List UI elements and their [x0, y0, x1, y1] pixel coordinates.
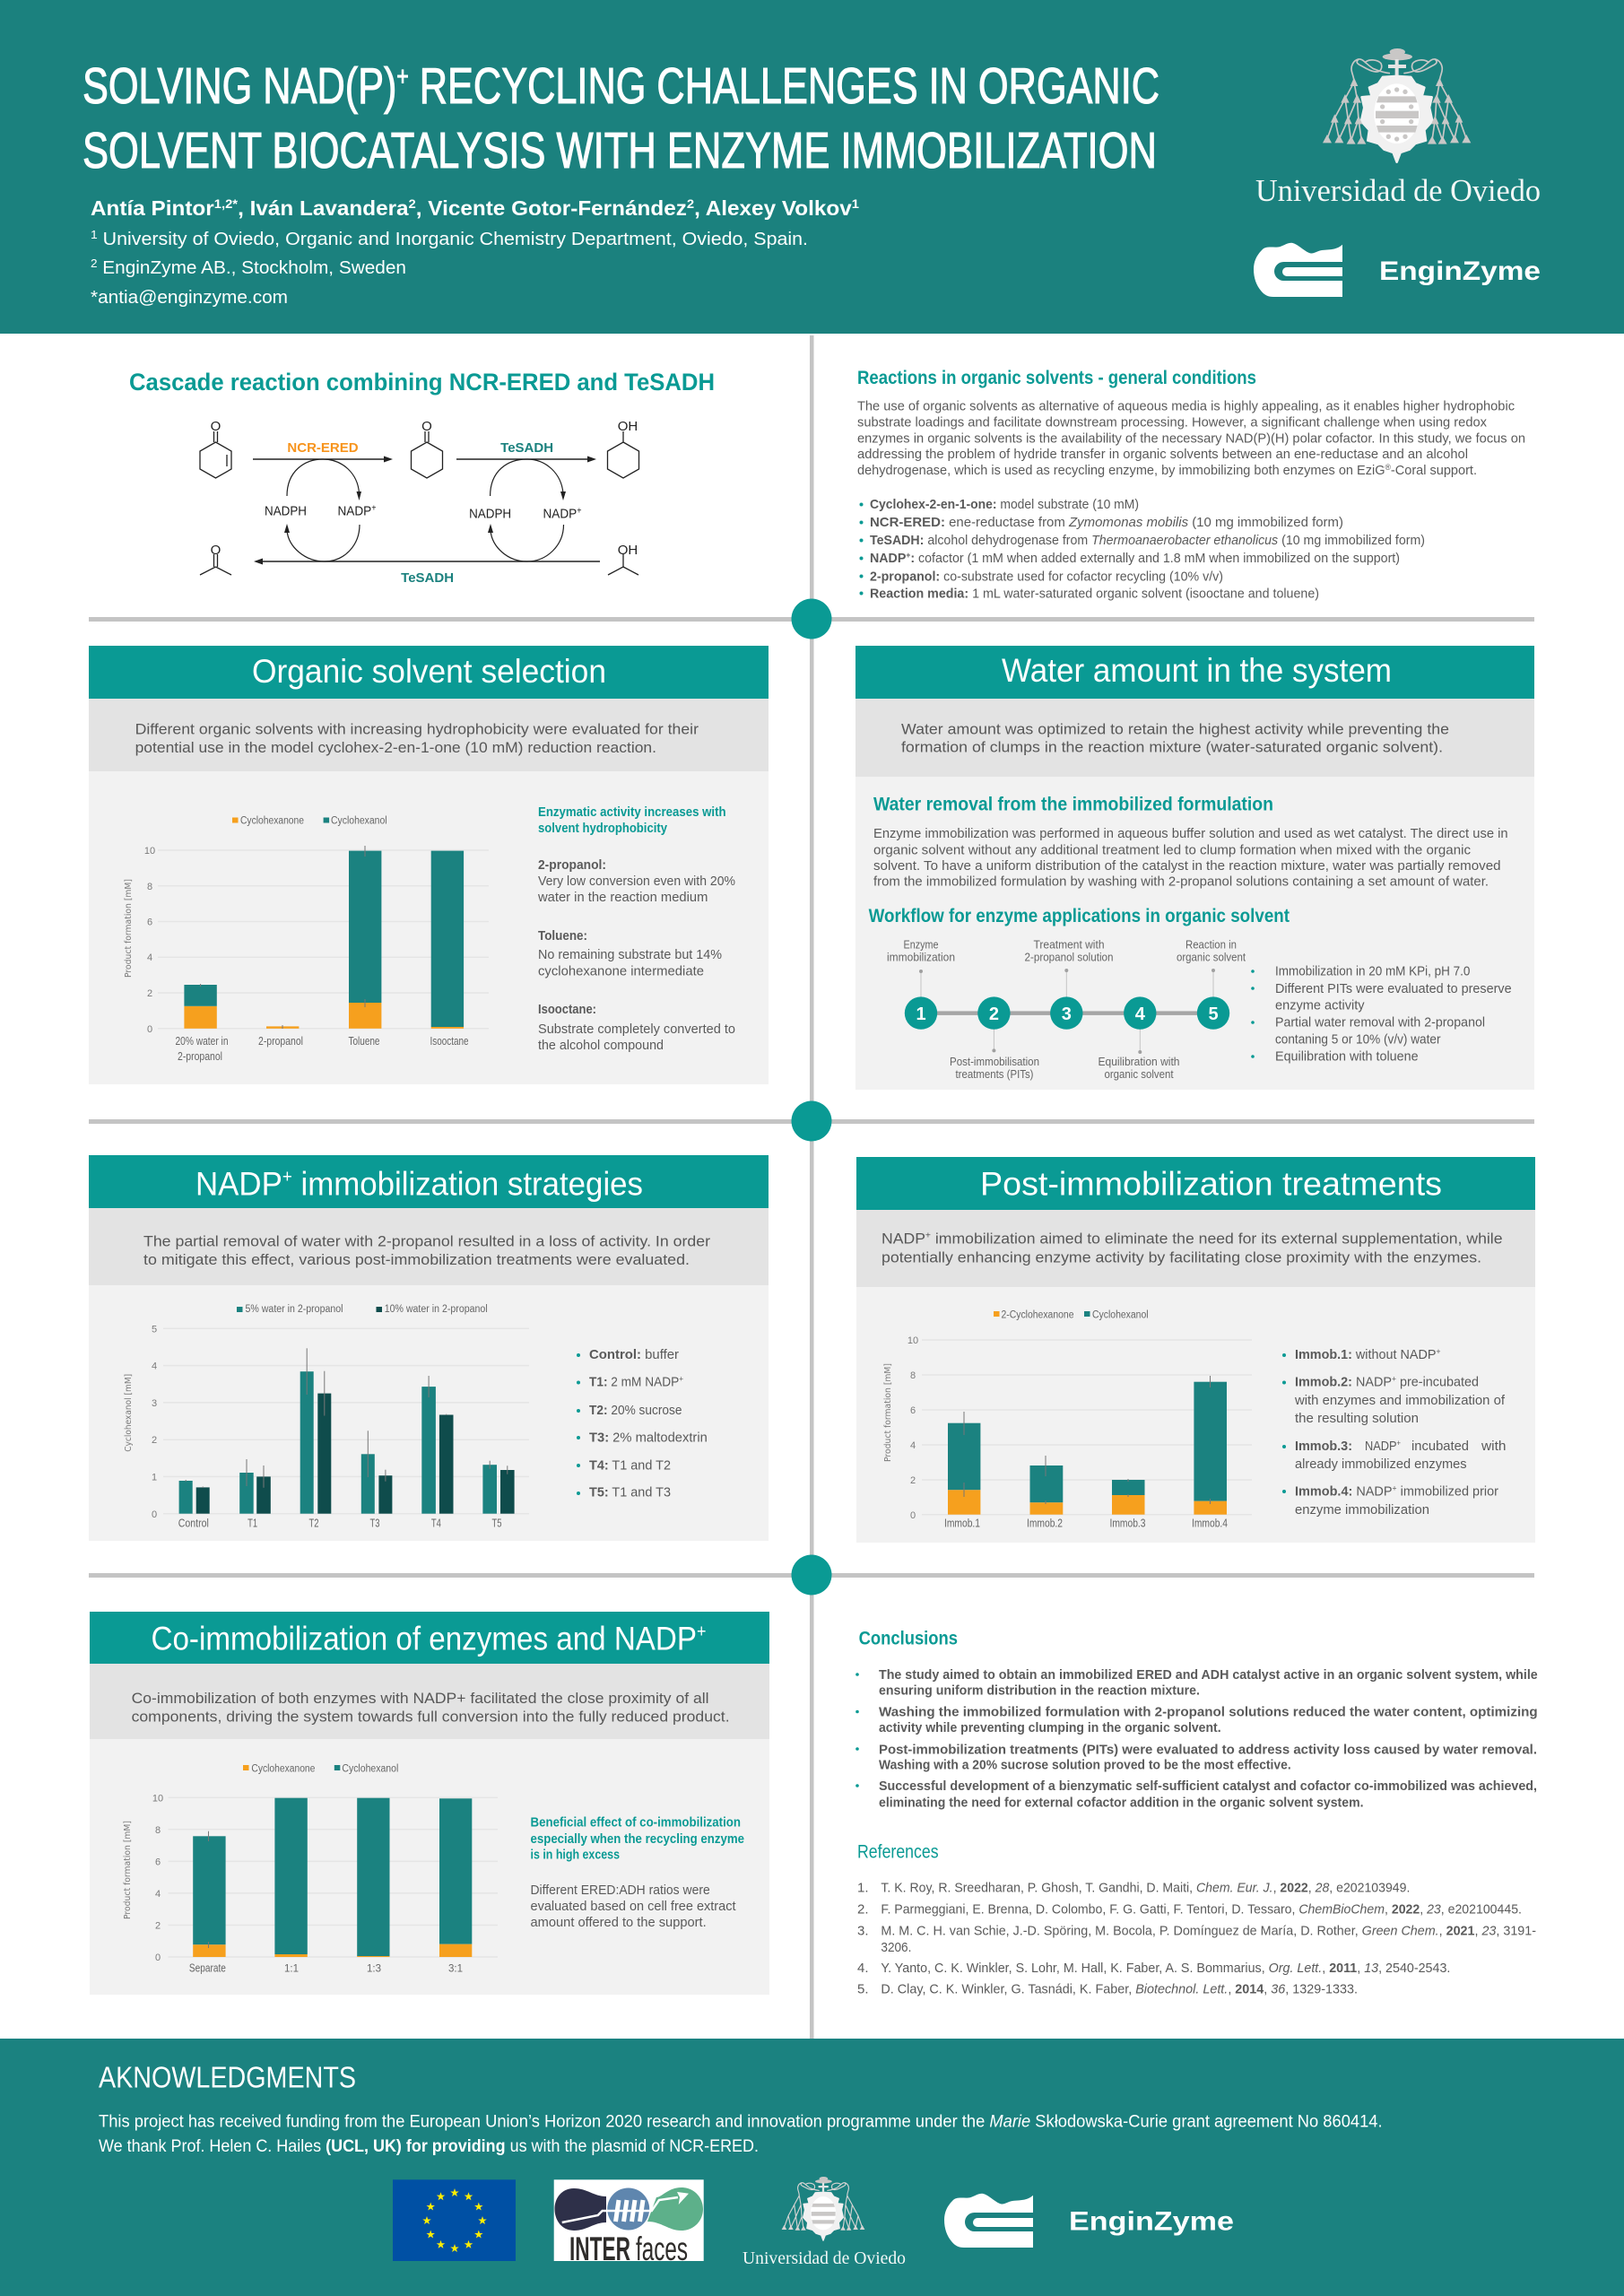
bar chart: co-immobilization: 2: [155, 1921, 161, 1932]
paragraph: general conditions: dehydrogenase, which is used as recycling enzyme, by immobilizing both enzymes on EziG: [857, 463, 1403, 478]
panel: post-immobilization treatments: [856, 1157, 1535, 1543]
section title: water amount: [855, 646, 1534, 699]
intro box: water amount: Water amount was optimized to retain the highest activity while preventing the: [901, 721, 1449, 738]
intro box: solvent selection: [89, 699, 769, 771]
affiliations: *antia@enginzyme.com: [91, 288, 288, 308]
legend: [232, 816, 387, 827]
list: references: 3.: [857, 1923, 869, 1938]
bar chart: solvent selection: Isooctane: [430, 1035, 469, 1048]
list: workflow notes: enzyme activity: [1275, 998, 1365, 1013]
bar chart: co-immobilization: 1:3: [367, 1963, 381, 1974]
takeaways: solvent selection: Enzymatic activity increases with: [538, 804, 726, 820]
heading: references: References: [857, 1841, 939, 1862]
paragraph: general conditions: enzymes in organic solvents is the availability of the necessary NAD(P)(H) polar cofactor. In this study, we focus on: [857, 430, 1525, 446]
bar chart: cyclohexanol: Control: [178, 1518, 209, 1530]
bar chart: co-immobilization: Product formation [mM]: [123, 1821, 133, 1919]
intro box: water amount: formation of clumps in the reaction mixture (water-saturated organic solvent).: [901, 739, 1443, 756]
section title: strategies: immobilization strategies: [292, 1166, 643, 1203]
workflow timeline: Equilibration with: [1098, 1056, 1180, 1068]
list: workflow notes: Different PITs were evaluated to preserve: [1275, 981, 1512, 996]
intro box: solvent selection: Different organic solvents with increasing hydrophobicity were evaluated for their: [135, 721, 699, 738]
list: immobilization methods: Immob.3:: [1295, 1439, 1352, 1454]
EnginZyme wordmark small: EnginZyme: [1069, 2207, 1234, 2237]
list: immobilization methods: +: [1393, 1483, 1397, 1492]
heading: conclusions: Conclusions: [859, 1628, 958, 1648]
legend: Cyclohexanol: [342, 1764, 398, 1775]
list: treatments: [577, 1347, 708, 1500]
section title: post-immobilization: Post-immobilization treatments: [980, 1166, 1442, 1203]
legend: [243, 1764, 398, 1775]
takeaways: solvent selection: Toluene:: [538, 928, 587, 944]
list: reaction conditions: +: [906, 551, 910, 560]
bar chart: immobilization: [883, 1309, 1252, 1530]
logo: INTERfaces: INTER: [569, 2231, 630, 2267]
EnginZyme wordmark: EnginZyme: [1379, 257, 1541, 286]
paragraph: water removal: organic solvent without any additional treatment led to clump formation when mixed with the organic: [873, 843, 1471, 857]
list: conclusions: Successful development of a bienzymatic self-sufficient catalyst and cofactor co-immobilized was achieved,: [879, 1779, 1537, 1794]
paragraph: water removal: Enzyme immobilization was performed in aqueous buffer solution and used as wet catalyst. The direct use in: [873, 826, 1508, 841]
legend: 5% water in 2-propanol: [246, 1304, 343, 1315]
reaction scheme: O: [211, 543, 221, 558]
list: conclusions: activity while preventing clumping in the organic solvent.: [879, 1720, 1221, 1735]
takeaways: co-immobilization: [531, 1815, 744, 1930]
takeaways: co-immobilization: amount offered to the support.: [531, 1915, 707, 1930]
title: SOLVING NAD(P): [83, 57, 496, 115]
takeaways: solvent selection: cyclohexanone intermediate: [538, 963, 704, 979]
horizontal divider 2: [89, 1119, 1534, 1124]
intro box: water amount: [855, 699, 1534, 777]
workflow timeline: organic solvent: [1177, 951, 1246, 963]
reaction scheme: OH: [618, 419, 638, 434]
reaction scheme: NCR-ERED: [287, 440, 359, 456]
list: conclusions: eliminating the need for external cofactor addition in the organic solvent system.: [879, 1795, 1363, 1810]
node circle 3: [791, 1555, 832, 1595]
list: immobilization methods: +: [1392, 1375, 1396, 1384]
list: immobilization methods: Immob.2: NADP: [1295, 1375, 1394, 1390]
header banner: [0, 0, 1624, 334]
list: reaction conditions: 2-propanol: co-substrate used for cofactor recycling (10% v/v): [870, 569, 1223, 585]
section title: co-immobilization: +: [697, 1622, 707, 1641]
reaction scheme: +: [371, 504, 377, 513]
takeaways: solvent selection: solvent hydrophobicity: [538, 821, 668, 836]
paragraph: general conditions: ®: [1385, 463, 1391, 472]
list: immobilization methods: already immobilized enzymes: [1295, 1457, 1467, 1472]
legend: Cyclohexanone: [240, 816, 304, 827]
paragraph: water removal: solvent. To have a uniform distribution of the catalyst in the reaction mixture, water was partially removed: [873, 858, 1501, 874]
list: treatments: T3: 2% maltodextrin: [589, 1430, 708, 1445]
list: reaction conditions: Reaction media: 1 mL water-saturated organic solvent (isooctane and toluene): [870, 587, 1319, 601]
logo: small crest: [782, 2177, 864, 2240]
workflow timeline: 5: [1208, 1004, 1219, 1024]
reaction scheme: OH: [618, 543, 638, 558]
list: workflow notes: Equilibration with toluene: [1275, 1049, 1419, 1064]
intro box: post-immobilization: [856, 1210, 1535, 1287]
reaction scheme: NADP: [543, 506, 580, 522]
workflow timeline: Enzyme: [904, 938, 939, 951]
list: treatments: T4: T1 and T2: [589, 1457, 671, 1473]
list: references: 3206.: [881, 1940, 911, 1955]
paragraph: general conditions: The use of organic solvents as alternative of aqueous media is highly appealing, as it enables higher hydrophobic: [857, 399, 1515, 414]
authors: 2: [687, 196, 694, 211]
bar chart: immobilization: Immob.1: [944, 1518, 980, 1530]
affiliations: 1: [91, 228, 98, 241]
bar chart: solvent selection: 2-propanol: [258, 1035, 303, 1048]
workflow timeline: Reaction in: [1185, 938, 1237, 951]
bar chart: solvent selection: 6: [147, 917, 152, 927]
heading: cascade: Cascade reaction combining NCR-ERED and TeSADH: [129, 369, 715, 396]
list: conclusions: Washing the immobilized formulation with 2-propanol solutions reduced the water content, optimizing: [879, 1705, 1538, 1720]
logo: INTERfaces: faces: [636, 2231, 688, 2267]
intro box: solvent selection: potential use in the model cyclohex-2-en-1-one (10 mM) reduction reaction.: [135, 739, 656, 756]
paragraph: water removal: from the immobilized formulation by washing with 2-propanol solutions containing a set amount of water.: [873, 874, 1489, 890]
intro box: co-immobilization: components, driving the system towards full conversion into the fully reduced product.: [132, 1709, 730, 1726]
legend: Cyclohexanol: [331, 816, 387, 827]
list: treatments: Control: buffer: [589, 1347, 679, 1362]
takeaways: solvent selection: 2-propanol:: [538, 857, 606, 873]
panel: cascade reaction: [129, 369, 715, 586]
list: immobilization methods: with: [1481, 1439, 1507, 1454]
section title: solvent selection: Organic solvent selection: [252, 653, 606, 690]
list: treatments: T1: 2 mM NADP: [589, 1375, 686, 1390]
logo: Universidad de Oviedo crest: [1323, 48, 1471, 162]
legend: Cyclohexanone: [251, 1764, 315, 1775]
bar chart: solvent selection: [124, 816, 489, 1063]
paragraph: general conditions: [857, 399, 1525, 478]
title: [83, 57, 1159, 179]
list: references: 1.: [857, 1880, 869, 1895]
list: treatments: T5: T1 and T3: [589, 1485, 671, 1500]
list: conclusions: ensuring uniform distribution in the reaction mixture.: [879, 1683, 1200, 1698]
section title: post-immobilization: [856, 1157, 1535, 1210]
bar chart: immobilization: 2: [910, 1475, 916, 1486]
bar chart: cyclohexanol: 1: [152, 1473, 157, 1483]
list: references: D. Clay, C. K. Winkler, G. Tasnádi, K. Faber, Biotechnol. Lett., 2014, 36, 1329-1333.: [881, 1982, 1358, 1997]
takeaways: co-immobilization: Different ERED:ADH ratios were: [531, 1883, 710, 1898]
node circle 2: [791, 1101, 832, 1141]
bar chart: co-immobilization: 6: [155, 1857, 161, 1867]
bar chart: solvent selection: 20% water in: [176, 1035, 229, 1048]
takeaways: solvent selection: Isooctane:: [538, 1002, 596, 1017]
list: reaction conditions: cofactor (1 mM when added externally and 1.8 mM when immobilized on the support): [918, 551, 1426, 566]
bar chart: solvent selection: Product formation [mM]: [124, 879, 134, 978]
horizontal divider 3: [89, 1573, 1534, 1578]
list: immobilization methods: incubated: [1411, 1439, 1469, 1454]
logo: INTERfaces: [554, 2179, 704, 2267]
intro box: post-immobilization: +: [925, 1231, 931, 1241]
paragraph: general conditions: addressing the problem of hydride transfer in organic solvents between an ene-reductase and an alcohol: [857, 447, 1468, 462]
bar chart: solvent selection: 2-propanol: [178, 1050, 222, 1063]
list: reaction conditions: Cyclohex-2-en-1-one: model substrate (10 mM): [870, 497, 1139, 512]
panel: organic solvent selection: [89, 646, 769, 1084]
intro box: co-immobilization: [90, 1664, 769, 1739]
panel: conclusions: [855, 1628, 1538, 1997]
reaction scheme: NADPH: [469, 506, 511, 522]
bar chart: co-immobilization: 8: [155, 1825, 161, 1836]
affiliations: [91, 228, 808, 308]
intro box: strategies: to mitigate this effect, various post-immobilization treatments were evaluated.: [143, 1251, 690, 1268]
reaction scheme: O: [211, 419, 221, 434]
list: conclusions: Washing with a 20% sucrose solution proved to be the most effective.: [879, 1758, 1291, 1773]
section title: co-immobilization: [90, 1612, 769, 1664]
list: reaction conditions: NADP: [870, 551, 906, 566]
affiliations: University of Oviedo, Organic and Inorganic Chemistry Department, Oviedo, Spain.: [98, 230, 808, 249]
panel: water amount: [855, 646, 1534, 1090]
list: immobilization methods: Immob.1: without NADP: [1295, 1347, 1439, 1362]
list: immobilization methods: +: [1397, 1439, 1401, 1448]
reaction scheme: TeSADH: [401, 570, 454, 586]
horizontal divider 1: [89, 617, 1534, 622]
bar chart: solvent selection: 0: [147, 1024, 152, 1035]
legend: [994, 1309, 1149, 1320]
reaction scheme: [200, 419, 638, 586]
legend: 2-Cyclohexanone: [1001, 1309, 1074, 1320]
list: reaction conditions: NCR-ERED: ene-reductase from Zymomonas mobilis (10 mg immobilized form): [870, 515, 1343, 530]
paragraph: general conditions: substrate loadings and facilitate downstream processing. However, a significant challenge when using redox: [857, 414, 1487, 430]
heading: water removal: Water removal from the immobilized formulation: [873, 795, 1273, 815]
paragraph: water removal: [873, 826, 1508, 890]
list: workflow notes: [1251, 963, 1512, 1064]
bar chart: co-immobilization: 1:1: [284, 1963, 299, 1974]
bar chart: solvent selection: 8: [147, 882, 152, 892]
workflow timeline: 1: [916, 1004, 926, 1024]
affiliations: 2: [91, 257, 98, 270]
bar chart: cyclohexanol: 3: [152, 1398, 157, 1409]
section title: strategies: +: [282, 1168, 292, 1187]
list: reaction conditions: [859, 497, 1425, 601]
bar chart: solvent selection: 2: [147, 988, 152, 999]
authors: 2: [409, 196, 416, 211]
workflow timeline: organic solvent: [1105, 1068, 1174, 1081]
bar chart: co-immobilization: 0: [155, 1952, 161, 1963]
funding text: This project has received funding from the European Union’s Horizon 2020 research and innovation programme under the Marie Skłodowska-Curie grant agreement No 860414.: [99, 2113, 1383, 2132]
intro box: post-immobilization: NADP: [881, 1231, 924, 1248]
bar chart: immobilization: 0: [910, 1510, 916, 1521]
bar chart: cyclohexanol: T5: [491, 1518, 502, 1530]
bar chart: cyclohexanol: 0: [152, 1509, 157, 1520]
authors: Antía Pintor: [91, 196, 207, 220]
bar chart: immobilization: 6: [910, 1405, 916, 1416]
panel: reactions in organic solvents: [857, 367, 1525, 601]
legend: Cyclohexanol: [1092, 1309, 1149, 1320]
authors: 1: [852, 196, 859, 211]
small university name: Universidad de Oviedo: [743, 2249, 906, 2268]
heading: general conditions: Reactions in organic solvents - general conditions: [857, 367, 1256, 388]
list: workflow notes: contaning 5 or 10% (v/v) water: [1275, 1032, 1440, 1048]
workflow timeline: Treatment with: [1033, 938, 1105, 951]
university name: Universidad de Oviedo: [1255, 173, 1541, 208]
list: immobilization methods: the resulting solution: [1295, 1411, 1419, 1426]
section title: strategies: NADP: [195, 1166, 288, 1203]
bar chart: co-immobilization: [123, 1764, 498, 1974]
list: references: Y. Yanto, C. K. Winkler, S. Lohr, M. Hall, K. Faber, A. S. Bommarius, Org. Lett., 2011, 13, 2540-2543.: [881, 1961, 1450, 1976]
bar chart: immobilization: 10: [908, 1335, 918, 1346]
list: conclusions: [855, 1667, 1538, 1810]
vertical divider: [810, 335, 814, 2039]
bar chart: solvent selection: 4: [147, 952, 152, 963]
workflow timeline: [887, 938, 1246, 1081]
section title: water amount: Water amount in the system: [1002, 652, 1392, 689]
list: treatments: T2: 20% sucrose: [589, 1403, 682, 1418]
node circle 1: [791, 599, 832, 639]
workflow timeline: 3: [1062, 1004, 1072, 1024]
authors: , Iván Lavandera: [238, 196, 409, 220]
legend: 10% water in 2-propanol: [385, 1304, 488, 1315]
title: RECYCLING CHALLENGES IN ORGANIC: [409, 57, 1159, 115]
reaction scheme: +: [577, 506, 582, 517]
list: references: 5.: [857, 1982, 869, 1997]
workflow timeline: immobilization: [887, 951, 955, 963]
takeaways: solvent selection: [537, 804, 735, 1053]
list: workflow notes: Partial water removal with 2-propanol: [1275, 1015, 1485, 1031]
logo: EnginZyme mark small: [944, 2194, 1033, 2248]
panel: NADP+ immobilization strategies: [89, 1155, 769, 1541]
bar chart: immobilization: Immob.3: [1110, 1518, 1146, 1530]
funding text: We thank Prof. Helen C. Hailes (UCL, UK) for providing us with the plasmid of NCR-ERED.: [99, 2137, 759, 2156]
bar chart: solvent selection: 10: [144, 846, 155, 857]
workflow timeline: Post-immobilisation: [950, 1056, 1039, 1068]
section title: strategies: [89, 1155, 769, 1208]
list: references: [857, 1880, 1536, 1997]
workflow timeline: 2-propanol solution: [1024, 951, 1114, 963]
bar chart: co-immobilization: 4: [155, 1889, 161, 1900]
bar chart: cyclohexanol: 2: [152, 1435, 157, 1446]
list: treatments: +: [679, 1375, 683, 1384]
heading: workflow: Workflow for enzyme applications in organic solvent: [869, 906, 1290, 926]
list: references: 4.: [857, 1961, 869, 1976]
intro box: strategies: The partial removal of water with 2-propanol resulted in a loss of activity. In order: [143, 1232, 710, 1249]
section title: co-immobilization: Co-immobilization of enzymes and NADP: [151, 1620, 760, 1657]
logo: EnginZyme mark: [1254, 243, 1342, 297]
list: reaction conditions: TeSADH: alcohol dehydrogenase from Thermoanaerobacter ethanolicus (10 mg immobilized form): [870, 533, 1425, 548]
title: SOLVENT BIOCATALYSIS WITH ENZYME IMMOBILIZATION: [83, 122, 1157, 179]
heading: acknowledgments: AKNOWLEDGMENTS: [99, 2061, 356, 2094]
bar chart: cyclohexanol: 5: [152, 1324, 157, 1335]
takeaways: co-immobilization: evaluated based on cell free extract: [531, 1899, 736, 1914]
bar chart: immobilization: Immob.2: [1027, 1518, 1063, 1530]
bar chart: cyclohexanol: T4: [431, 1518, 441, 1530]
workflow timeline: 4: [1135, 1004, 1146, 1024]
takeaways: solvent selection: Substrate completely converted to: [538, 1022, 735, 1037]
paragraph: general conditions: -Coral support.: [1391, 463, 1477, 478]
list: references: F. Parmeggiani, E. Brenna, D. Colombo, F. G. Gatti, F. Tentori, D. Tessaro, ChemBioChem, 2022, 23, e202100445.: [881, 1901, 1522, 1917]
takeaways: solvent selection: No remaining substrate but 14%: [538, 947, 722, 962]
bar chart: cyclohexanol: T2: [308, 1518, 319, 1530]
list: immobilization methods: enzyme immobilization: [1295, 1502, 1429, 1518]
bar chart: immobilization: 8: [910, 1370, 916, 1381]
intro box: co-immobilization: Co-immobilization of both enzymes with NADP+ facilitated the close proximity of all: [132, 1690, 709, 1707]
bar chart: immobilization: Product formation [mM]: [883, 1363, 893, 1462]
intro box: post-immobilization: potentially enhancing enzyme activity by facilitating close proximity with the enzymes.: [881, 1248, 1481, 1265]
bar chart: immobilization: 4: [910, 1440, 916, 1451]
list: immobilization methods: [1282, 1347, 1507, 1518]
bar chart: co-immobilization: Separate: [189, 1961, 226, 1974]
list: immobilization methods: pre-incubated: [1396, 1375, 1479, 1390]
list: workflow notes: Immobilization in 20 mM KPi, pH 7.0: [1275, 963, 1470, 979]
bar chart: cyclohexanol: T3: [369, 1518, 380, 1530]
takeaways: co-immobilization: Beneficial effect of co-immobilization: [531, 1815, 741, 1831]
list: conclusions: The study aimed to obtain an immobilized ERED and ADH catalyst active in an organic solvent system, while: [879, 1667, 1538, 1683]
reaction scheme: O: [421, 419, 432, 434]
authors: , Vicente Gotor-Fernández: [416, 196, 687, 220]
list: immobilization methods: with enzymes and immobilization of: [1294, 1393, 1506, 1408]
legend: [237, 1304, 488, 1315]
workflow timeline: treatments (PITs): [956, 1068, 1033, 1081]
reaction scheme: TeSADH: [500, 440, 553, 456]
logo: EU flag: [393, 2179, 516, 2261]
bar chart: solvent selection: Toluene: [348, 1035, 380, 1048]
intro box: post-immobilization: immobilization aimed to eliminate the need for its external supplementation, while: [931, 1231, 1503, 1248]
bar chart: cyclohexanol: Cyclohexanol [mM]: [124, 1374, 134, 1452]
bar chart: cyclohexanol: [124, 1304, 529, 1530]
panel: co-immobilization: [90, 1612, 769, 1995]
bar chart: co-immobilization: 10: [152, 1794, 163, 1805]
takeaways: co-immobilization: is in high excess: [531, 1848, 620, 1863]
reaction scheme: NADP: [337, 504, 375, 518]
takeaways: solvent selection: the alcohol compound: [538, 1038, 664, 1053]
funding text: [99, 2113, 1383, 2156]
list: references: T. K. Roy, R. Sreedharan, P. Ghosh, T. Gandhi, D. Maiti, Chem. Eur. J., 2022, 28, e202103949.: [881, 1880, 1410, 1895]
takeaways: solvent selection: water in the reaction medium: [537, 890, 708, 905]
footer: acknowledgments: [0, 2039, 1624, 2296]
list: conclusions: Post-immobilization treatments (PITs) were evaluated to address activity loss caused by water removal.: [879, 1742, 1537, 1757]
authors: , Alexey Volkov: [694, 196, 852, 220]
list: immobilization methods: Immob.4: NADP: [1295, 1483, 1394, 1499]
list: references: M. M. C. H. van Schie, J.-D. Spöring, M. Bocola, P. Domínguez de María, D. Rother, Green Chem., 2021, 23, 3191-: [881, 1923, 1536, 1938]
section title: solvent selection: [89, 646, 769, 699]
workflow timeline: 2: [989, 1004, 999, 1024]
bar chart: immobilization: Immob.4: [1192, 1518, 1228, 1530]
intro box: strategies: [89, 1208, 769, 1285]
bar chart: co-immobilization: 3:1: [448, 1963, 463, 1974]
takeaways: solvent selection: Very low conversion even with 20%: [538, 874, 735, 889]
list: references: 2.: [857, 1901, 869, 1917]
list: immobilization methods: NADP: [1365, 1439, 1403, 1454]
bar chart: cyclohexanol: 4: [152, 1361, 157, 1372]
reaction scheme: NADPH: [265, 504, 307, 518]
bar chart: cyclohexanol: T1: [248, 1518, 257, 1530]
list: immobilization methods: +: [1436, 1347, 1441, 1356]
authors: 1,2*: [214, 196, 239, 211]
list: immobilization methods: immobilized prior: [1397, 1483, 1498, 1499]
affiliations: EnginZyme AB., Stockholm, Sweden: [98, 258, 406, 278]
takeaways: co-immobilization: especially when the recycling enzyme: [531, 1831, 744, 1847]
list: reaction conditions: :: [910, 551, 915, 566]
title: +: [396, 62, 409, 91]
